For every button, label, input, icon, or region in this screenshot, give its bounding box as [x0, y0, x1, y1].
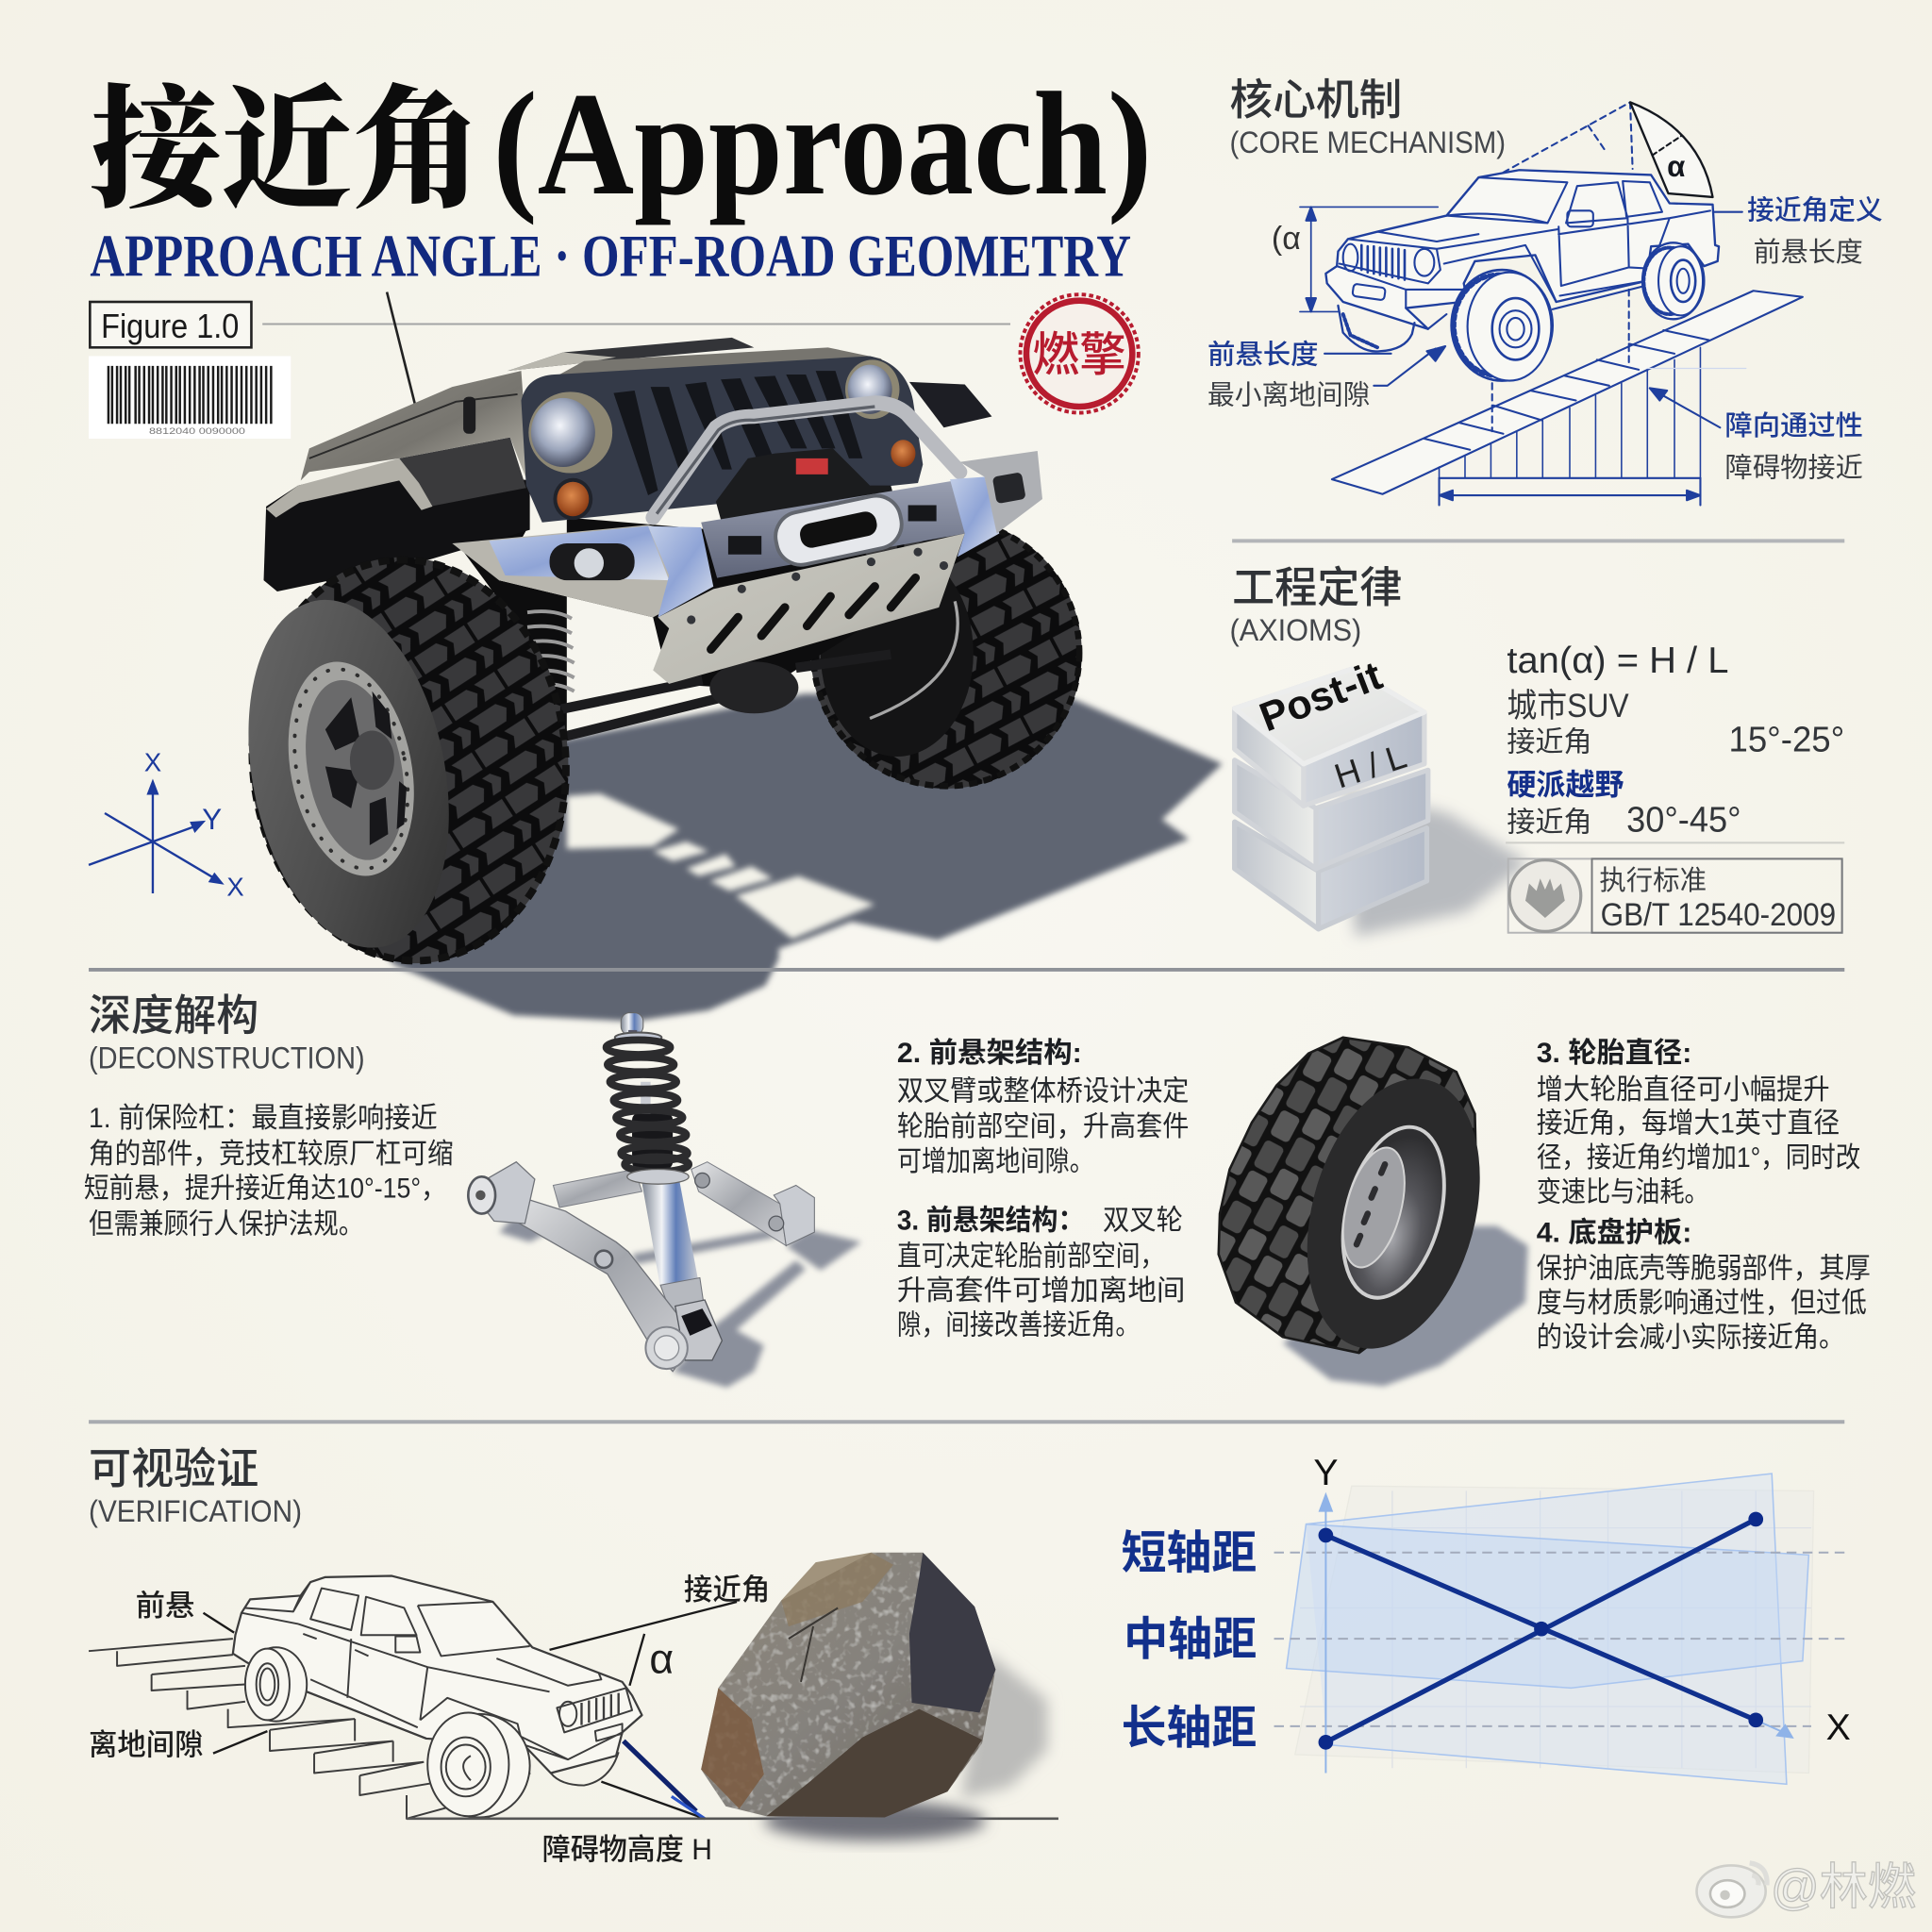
dimension arrow	[1300, 207, 1438, 311]
line art labels: 障碍物高度 H	[542, 1833, 712, 1866]
dashed levels	[1274, 1553, 1847, 1726]
blueprint diagram	[1300, 102, 1803, 506]
text: tyre diameter and skid plate: 增大轮胎直径可小幅提升	[1537, 1074, 1830, 1106]
section: verification heading: (VERIFICATION)	[89, 1493, 302, 1528]
blueprint labels: 前悬长度	[1208, 340, 1319, 370]
bull bar	[653, 403, 959, 518]
line art leaders	[204, 1602, 1058, 1819]
line art labels: 前悬	[136, 1589, 194, 1622]
subtitle: APPROACH ANGLE · OFF-ROAD GEOMETRY	[90, 223, 1131, 290]
main arm	[503, 1191, 691, 1372]
line art labels: α	[649, 1637, 674, 1683]
text: suspension: 可增加离地间隙。	[897, 1146, 1094, 1177]
text: suspension: 双叉臂或整体桥设计决定	[897, 1075, 1189, 1107]
cast shadows	[499, 1214, 861, 1388]
top pin	[621, 1013, 643, 1035]
section: axioms heading: (AXIOMS)	[1230, 612, 1361, 647]
coil spring	[607, 1033, 689, 1172]
text: suspension: 双叉轮	[1103, 1206, 1183, 1237]
sidewall	[1279, 1059, 1507, 1368]
blueprint labels: 障碍物接近	[1725, 453, 1863, 483]
side panel	[301, 371, 530, 488]
icon: suspension assembly	[468, 1013, 861, 1388]
axis gizmo: X	[144, 748, 161, 777]
section: core mechanism heading: 核心机制	[1230, 75, 1402, 124]
stacked blocks	[1235, 653, 1528, 937]
title	[92, 44, 1152, 235]
line art labels	[89, 1573, 770, 1866]
rim	[1325, 1116, 1461, 1309]
figure label: Figure 1.0	[101, 307, 239, 345]
axis gizmo: Y	[202, 803, 222, 836]
wheelbase chart: Y	[1313, 1453, 1338, 1493]
text: suspension: 升高套件可增加离地间	[897, 1275, 1185, 1307]
guide lines	[1492, 102, 1682, 431]
section: axioms heading: 工程定律	[1232, 564, 1402, 612]
wheel arch	[264, 462, 530, 591]
tyre shadow	[1283, 1226, 1528, 1386]
grille	[557, 1688, 632, 1732]
text: tyre diameter and skid plate: 度与材质影响通过性，但过低	[1537, 1288, 1867, 1319]
section: verification heading: 可视验证	[89, 1445, 258, 1493]
right arm	[691, 1162, 786, 1245]
ramp	[1332, 291, 1803, 506]
stamp: 燃擎	[1033, 328, 1126, 381]
far tyre	[810, 518, 1082, 789]
winch	[716, 448, 899, 542]
text: front bumper: 但需兼顾行人保护法规。	[89, 1208, 363, 1240]
blueprint labels: 前悬长度	[1754, 238, 1863, 268]
text: tyre diameter and skid plate: 接近角，每增大1英寸直径	[1537, 1108, 1840, 1139]
axioms values	[1507, 641, 1844, 841]
blue sheets	[1306, 1474, 1787, 1784]
icon: tyre	[1219, 1038, 1528, 1386]
text: front bumper: 短前悬，提升接近角达10°-15°，	[84, 1174, 446, 1205]
section: verification heading	[89, 1445, 302, 1528]
text: tyre diameter and skid plate: 的设计会减小实际接近角。	[1537, 1323, 1844, 1354]
wheels	[551, 1752, 619, 1786]
standard box	[1508, 858, 1842, 933]
jeep illustration	[221, 292, 1082, 976]
text: suspension: 轮胎前部空间，升高套件	[897, 1111, 1189, 1142]
text: tyre diameter and skid plate: 径，接近角约增加1°，同时改	[1537, 1142, 1860, 1174]
cowl	[521, 347, 913, 400]
wheelbase chart labels	[1122, 1528, 1257, 1754]
front tyre	[221, 544, 585, 976]
text: front bumper: 角的部件，竞技杠较原厂杠可缩	[89, 1139, 454, 1170]
standard box: 执行标准	[1599, 866, 1707, 896]
flare band	[266, 458, 432, 518]
text: front bumper	[84, 1103, 454, 1240]
section: deconstruction heading	[89, 991, 365, 1074]
blueprint labels: 最小离地间隙	[1208, 380, 1370, 410]
axle	[558, 655, 891, 737]
blueprint labels: (α	[1272, 221, 1301, 257]
wheelbase chart labels: 中轴距	[1124, 1614, 1257, 1665]
hood scoop	[508, 338, 754, 371]
axioms values: 接近角	[1507, 727, 1592, 758]
wheelbase chart: X	[1826, 1707, 1851, 1748]
tread	[1219, 1038, 1476, 1353]
section: core mechanism heading: (CORE MECHANISM)	[1230, 125, 1506, 159]
icon: rock	[701, 1553, 1047, 1840]
coil spring	[527, 611, 575, 691]
axis gizmo	[89, 748, 244, 902]
leader lines	[1324, 212, 1742, 427]
skid plate	[653, 534, 965, 684]
text: tyre diameter and skid plate: 保护油底壳等脆弱部件，其厚	[1537, 1253, 1871, 1284]
line art labels: 离地间隙	[89, 1728, 204, 1761]
left bracket	[470, 1162, 535, 1224]
flare panel	[399, 438, 526, 507]
text: tyre diameter and skid plate: 3. 轮胎直径:	[1537, 1038, 1691, 1069]
axioms values: 硬派越野	[1507, 768, 1624, 801]
title: (Approach)	[492, 61, 1152, 225]
text: tyre diameter and skid plate: 4. 底盘护板:	[1537, 1218, 1691, 1249]
barcode: 8812040 0090000	[149, 426, 245, 436]
body	[233, 1576, 641, 1774]
front bumper	[452, 451, 1042, 617]
text: suspension: 隙，间接改善接近角。	[897, 1310, 1140, 1341]
text: suspension	[897, 1038, 1189, 1341]
watermark: @林燃	[1771, 1860, 1916, 1915]
wheels	[1338, 306, 1414, 352]
line art: stairs and suv	[89, 1576, 641, 1819]
axioms values: 城市SUV	[1507, 688, 1629, 724]
text: tyre diameter and skid plate: 变速比与油耗。	[1537, 1176, 1709, 1208]
barcode	[89, 356, 291, 439]
roller	[675, 1300, 722, 1360]
antenna	[387, 292, 415, 406]
rear rod	[553, 1170, 641, 1208]
standard box: GB/T 12540-2009	[1601, 897, 1836, 933]
text: suspension: 2. 前悬架结构:	[897, 1038, 1082, 1069]
suv body	[1325, 170, 1719, 329]
grille slots	[613, 371, 862, 495]
right fender	[909, 382, 991, 427]
axioms values: 15°-25°	[1728, 721, 1844, 760]
watermark	[1697, 1860, 1916, 1917]
axioms values: 接近角	[1507, 808, 1592, 839]
damper tube	[641, 1178, 699, 1288]
blueprint labels: 障向通过性	[1725, 411, 1863, 441]
section: core mechanism heading	[1230, 75, 1506, 159]
fairlead	[771, 491, 907, 570]
crossing lines	[1325, 1519, 1756, 1742]
wheelbase chart labels: 短轴距	[1122, 1528, 1257, 1579]
jeep ground shadow	[370, 693, 1223, 1022]
sidewall	[221, 582, 476, 965]
wheelbase chart labels: 长轴距	[1122, 1703, 1257, 1754]
stairs	[89, 1639, 447, 1819]
text: suspension: 直可决定轮胎前部空间，	[897, 1241, 1164, 1272]
text: tyre diameter and skid plate	[1537, 1038, 1871, 1354]
stamp	[1020, 294, 1139, 413]
angle sector	[1630, 102, 1713, 197]
axes	[1325, 1503, 1789, 1774]
section: axioms heading	[1230, 564, 1402, 647]
section: deconstruction heading: 深度解构	[89, 991, 258, 1040]
axioms values: tan(α) = H / L	[1507, 641, 1728, 681]
rim	[271, 651, 431, 887]
axioms values: 30°-45°	[1626, 801, 1741, 841]
headlights	[528, 359, 915, 520]
grille panel	[521, 356, 923, 523]
stacked blocks: H / L	[1330, 737, 1411, 796]
stacked blocks: Post-it	[1254, 653, 1388, 741]
faint grid sheet	[1295, 1486, 1814, 1774]
wheelbase chart	[1274, 1453, 1851, 1784]
points	[1319, 1512, 1763, 1750]
blueprint diagram: α	[1667, 150, 1685, 183]
section: deconstruction heading: (DECONSTRUCTION)	[89, 1040, 365, 1074]
title: 接近角	[92, 44, 483, 235]
fog lamp	[550, 543, 635, 580]
blueprint labels: 接近角定义	[1747, 195, 1883, 225]
text: front bumper: 1. 前保险杠：最直接影响接近	[89, 1103, 438, 1134]
text: suspension: 3. 前悬架结构：	[897, 1206, 1084, 1237]
axis gizmo: X	[226, 873, 244, 902]
blueprint labels	[1208, 195, 1883, 483]
rubber stop	[632, 1112, 673, 1170]
underbody	[430, 507, 862, 737]
line art labels: 接近角	[684, 1573, 770, 1606]
